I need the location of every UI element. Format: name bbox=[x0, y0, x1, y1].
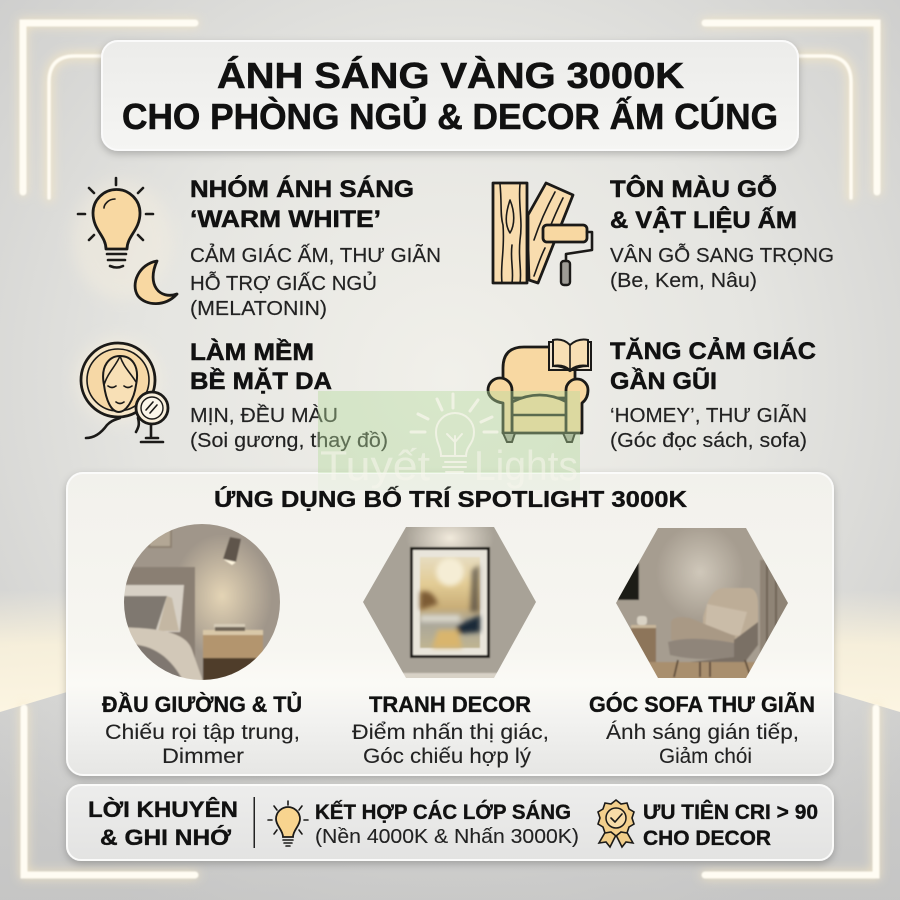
watermark: Tuyết bbox=[320, 442, 430, 489]
caption: bedside: Chiếu rọi tập trung, bbox=[105, 721, 300, 744]
icon: small bulb bbox=[268, 801, 308, 846]
section heading: ỨNG DỤNG BỐ TRÍ SPOTLIGHT 3000K bbox=[214, 485, 687, 512]
caption: bedside bbox=[102, 692, 302, 768]
tip: light layers: (Nền 4000K & Nhấn 3000K) bbox=[315, 826, 579, 848]
text block: warm white: (MELATONIN) bbox=[190, 298, 327, 320]
text block: warm white: HỖ TRỢ GIẤC NGỦ bbox=[190, 271, 377, 295]
text block: homey: TĂNG CẢM GIÁC bbox=[610, 336, 816, 365]
caption: sofa: Giảm chói bbox=[659, 745, 752, 768]
title panel bbox=[102, 41, 798, 150]
text block: skin: MỊN, ĐỀU MÀU bbox=[190, 404, 338, 427]
text block: warm white bbox=[190, 175, 441, 320]
tip: light layers: KẾT HỢP CÁC LỚP SÁNG bbox=[315, 800, 571, 824]
photo: framed painting bbox=[363, 527, 536, 678]
text block: wood tones: (Be, Kem, Nâu) bbox=[610, 270, 757, 292]
text block: warm white: ‘WARM WHITE’ bbox=[190, 206, 381, 233]
caption: painting: TRANH DECOR bbox=[369, 692, 531, 717]
caption: painting: Góc chiếu hợp lý bbox=[363, 745, 532, 768]
caption: painting: Điểm nhấn thị giác, bbox=[352, 721, 549, 744]
text block: wood tones: TÔN MÀU GỖ bbox=[610, 174, 777, 203]
text block: wood tones bbox=[610, 174, 834, 292]
text block: homey: GẦN GŨI bbox=[610, 367, 717, 395]
icon: wood planks and roller bbox=[493, 183, 592, 285]
text block: wood tones: & VẬT LIỆU ẤM bbox=[610, 206, 797, 234]
icon: award badge bbox=[598, 800, 634, 847]
caption: sofa: Ánh sáng gián tiếp, bbox=[606, 721, 799, 744]
icon: armchair and book bbox=[488, 340, 591, 442]
icon: bulb and moon bbox=[72, 178, 177, 304]
text block: warm white: CẢM GIÁC ẤM, THƯ GIÃN bbox=[190, 243, 441, 267]
tip: light layers bbox=[315, 800, 579, 848]
title: ÁNH SÁNG VÀNG 3000K bbox=[217, 55, 684, 96]
watermark bbox=[318, 391, 580, 490]
text block: skin bbox=[190, 338, 388, 452]
icon: face in mirror bbox=[76, 338, 168, 442]
caption: painting bbox=[352, 692, 549, 768]
panel: tips bbox=[67, 785, 833, 860]
title: CHO PHÒNG NGỦ & DECOR ẤM CÚNG bbox=[122, 95, 778, 137]
text block: homey: ‘HOMEY’, THƯ GIÃN bbox=[610, 403, 807, 427]
caption: sofa: GÓC SOFA THƯ GIÃN bbox=[589, 692, 815, 717]
text block: skin: LÀM MỀM bbox=[190, 338, 314, 366]
caption: bedside: Dimmer bbox=[162, 745, 244, 768]
text block: warm white: NHÓM ÁNH SÁNG bbox=[190, 175, 414, 203]
text block: wood tones: VÂN GỖ SANG TRỌNG bbox=[610, 243, 834, 267]
text block: homey: (Góc đọc sách, sofa) bbox=[610, 430, 807, 452]
panel: spotlight applications bbox=[67, 473, 833, 775]
tips heading bbox=[88, 797, 238, 850]
text block: skin: BỀ MẶT DA bbox=[190, 367, 332, 395]
text block: skin: (Soi gương, thay đồ) bbox=[190, 430, 388, 452]
tip: CRI bbox=[643, 800, 818, 850]
photo: bedside bbox=[124, 524, 280, 680]
tip: CRI: ƯU TIÊN CRI > 90 bbox=[643, 800, 818, 824]
title bbox=[122, 55, 778, 137]
tips heading: & GHI NHỚ bbox=[100, 825, 231, 850]
text block: homey bbox=[610, 336, 816, 452]
tips heading: LỜI KHUYÊN bbox=[88, 797, 238, 822]
photo: sofa corner bbox=[612, 524, 792, 682]
tip: CRI: CHO DECOR bbox=[643, 827, 771, 850]
watermark: Lights bbox=[474, 442, 578, 489]
caption: bedside: ĐẦU GIƯỜNG & TỦ bbox=[102, 692, 302, 717]
caption: sofa bbox=[589, 692, 815, 768]
